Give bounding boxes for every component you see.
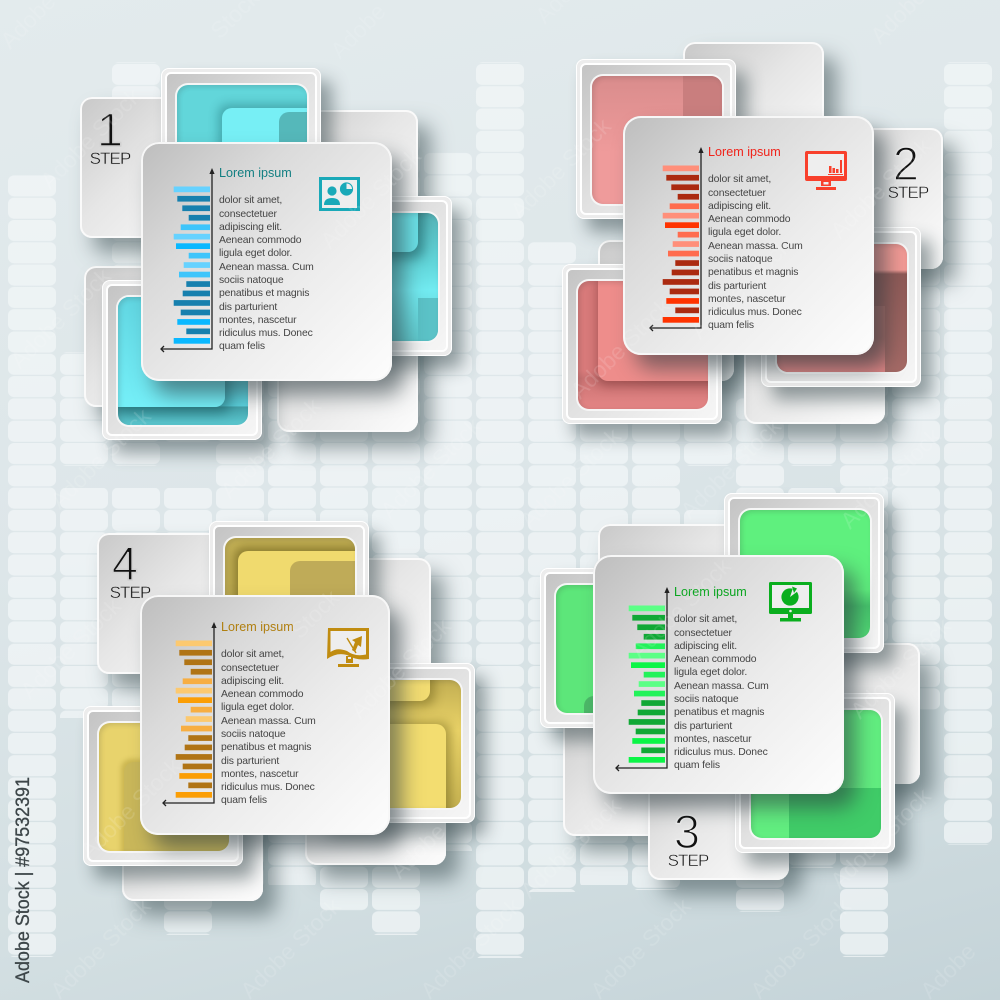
step 3 card bbox=[648, 739, 789, 880]
watermark: Adobe Stock: Adobe bbox=[385, 818, 451, 884]
frame: right yellow window bbox=[315, 663, 475, 823]
chart and text block: consectetuer bbox=[674, 628, 732, 639]
step 4 card bbox=[97, 533, 238, 674]
watermark: Adobe Stock: Adobe Stock bbox=[375, 413, 486, 524]
main card 3 bbox=[593, 555, 844, 794]
bar chart bbox=[615, 587, 670, 772]
watermark: Adobe Stock: Adobe Stock bbox=[565, 293, 676, 404]
chart and text block: montes, nascetur bbox=[708, 294, 785, 305]
chart and text block bbox=[615, 585, 769, 772]
chart and text block: ridiculus mus. Donec bbox=[221, 782, 315, 793]
step 2 card: 2 bbox=[893, 137, 919, 190]
watermark: Adobe Stock: Adobe Stock bbox=[35, 83, 146, 194]
chart and text block: sociis natoque bbox=[708, 254, 772, 265]
chart and text block: dis parturient bbox=[221, 756, 279, 767]
chart and text block: adipiscing elit. bbox=[221, 676, 284, 687]
chart and text block: quam felis bbox=[221, 795, 267, 806]
icon: monitor with bars bbox=[805, 151, 847, 190]
chart and text block: Aenean massa. Cum bbox=[708, 241, 803, 252]
watermark: Adobe Stock: Adobe Stock bbox=[675, 413, 786, 524]
watermark: Adobe Stock: Adobe Stock bbox=[5, 263, 116, 374]
watermark: Adobe Stock: Adobe Stock bbox=[15, 593, 126, 704]
chart and text block: penatibus et magnis bbox=[708, 267, 798, 278]
chart and text block: ligula eget dolor. bbox=[221, 702, 294, 713]
chart and text block: quam felis bbox=[219, 341, 265, 352]
main card 4 bbox=[140, 595, 390, 835]
watermark: Adobe Stock: Adobe Stock bbox=[345, 613, 456, 724]
panel: step 1 bbox=[80, 68, 474, 464]
chart and text block: ridiculus mus. Donec bbox=[219, 328, 313, 339]
frame: top yellow window bbox=[209, 521, 369, 681]
chart and text block: dolor sit amet, bbox=[221, 649, 284, 660]
watermark: Adobe Stock: Adobe bbox=[325, 0, 391, 64]
chart and text block bbox=[649, 145, 803, 332]
chart and text block: dis parturient bbox=[219, 302, 277, 313]
chart and text block: dis parturient bbox=[674, 721, 732, 732]
chart and text block: montes, nascetur bbox=[219, 315, 296, 326]
chart and text block: Aenean commodo bbox=[674, 654, 756, 665]
step 2 card: STEP bbox=[888, 183, 928, 202]
chart and text block: dolor sit amet, bbox=[674, 614, 737, 625]
frame: left green window bbox=[540, 568, 700, 728]
frame: bottom-left red window bbox=[562, 264, 722, 424]
bar chart bbox=[649, 147, 704, 332]
watermark: Adobe Stock: Adobe Stock bbox=[685, 233, 796, 344]
chart and text block: penatibus et magnis bbox=[221, 742, 311, 753]
watermark: Adobe Stock: Adobe Stock bbox=[315, 143, 426, 254]
chart and text block: Aenean commodo bbox=[219, 235, 301, 246]
watermark: Adobe Stock: Adobe Stock bbox=[215, 393, 326, 504]
step 4 card: 4 bbox=[112, 537, 138, 590]
watermark: Adobe Stock: Stock bbox=[285, 584, 345, 644]
chart and text block: ligula eget dolor. bbox=[219, 248, 292, 259]
chart and text block: consectetuer bbox=[221, 663, 279, 674]
chart and text block: montes, nascetur bbox=[674, 734, 751, 745]
watermark: Adobe Stock: Adobe Stock bbox=[75, 753, 186, 864]
watermark: Adobe Stock: Adobe Stock bbox=[835, 423, 946, 534]
step 1 card bbox=[80, 97, 221, 238]
chart and text block: Aenean commodo bbox=[708, 214, 790, 225]
bar chart bbox=[162, 622, 216, 806]
watermark: Adobe Stock: Adobe Stock bbox=[515, 423, 626, 534]
chart and text block: Aenean commodo bbox=[221, 689, 303, 700]
watermark: Adobe Stock: Adobe Stock bbox=[825, 783, 936, 894]
step 2 card bbox=[802, 128, 943, 269]
icon: monitor with pie chart bbox=[769, 582, 812, 622]
chart and text block: dis parturient bbox=[708, 281, 766, 292]
frame: right teal window bbox=[292, 196, 452, 356]
chart and text block: penatibus et magnis bbox=[674, 707, 764, 718]
panel: step 3 bbox=[539, 493, 947, 909]
watermark: Adobe Stock: Adobe Stock bbox=[825, 133, 936, 244]
chart and text block: sociis natoque bbox=[219, 275, 283, 286]
chart and text block bbox=[162, 620, 316, 806]
chart and text block: sociis natoque bbox=[674, 694, 738, 705]
watermark: Adobe Stock: Adobe Stock bbox=[45, 403, 156, 514]
chart and text block: consectetuer bbox=[219, 209, 277, 220]
icon: curved monitor with arrow bbox=[327, 628, 369, 667]
chart and text block: Lorem ipsum bbox=[219, 166, 292, 180]
frame: top-left red window bbox=[576, 59, 736, 219]
frame: right red window bbox=[761, 227, 921, 387]
frame: bottom-left teal window bbox=[102, 280, 262, 440]
chart and text block: ligula eget dolor. bbox=[708, 227, 781, 238]
chart and text block: Lorem ipsum bbox=[221, 620, 294, 634]
step 3 card: 3 bbox=[674, 805, 700, 858]
step 1 card: STEP bbox=[90, 149, 130, 168]
frame: bottom-left yellow window bbox=[83, 706, 243, 866]
chart and text block: Aenean massa. Cum bbox=[674, 681, 769, 692]
chart and text block: quam felis bbox=[708, 320, 754, 331]
credit line: Adobe Stock | #97532391 bbox=[13, 777, 34, 983]
chart and text block: ridiculus mus. Donec bbox=[708, 307, 802, 318]
icon: presenter screen bbox=[319, 177, 360, 211]
bar chart bbox=[160, 168, 214, 352]
step 3 card: STEP bbox=[668, 851, 708, 870]
watermark: Adobe Stock: Adobe Stock bbox=[505, 113, 616, 224]
chart and text block: montes, nascetur bbox=[221, 769, 298, 780]
chart and text block: sociis natoque bbox=[221, 729, 285, 740]
step 4 card: STEP bbox=[110, 583, 150, 602]
chart and text block: Aenean massa. Cum bbox=[221, 716, 316, 727]
chart and text block: ridiculus mus. Donec bbox=[674, 747, 768, 758]
chart and text block: Lorem ipsum bbox=[674, 585, 747, 599]
frame: top teal window bbox=[161, 68, 321, 228]
frame: bottom-right green window bbox=[735, 693, 895, 853]
chart and text block: consectetuer bbox=[708, 188, 766, 199]
frame: top green window bbox=[724, 493, 884, 653]
chart and text block: adipiscing elit. bbox=[219, 222, 282, 233]
watermark: Adobe Stock: Adobe Stock bbox=[625, 553, 736, 664]
panel: step 4 bbox=[83, 521, 498, 930]
main card 1 bbox=[141, 142, 392, 381]
step 1 card: 1 bbox=[97, 103, 123, 156]
chart and text block: Aenean massa. Cum bbox=[219, 262, 314, 273]
chart and text block: adipiscing elit. bbox=[708, 201, 771, 212]
watermark: Adobe Stock: Adobe Stock bbox=[515, 793, 626, 904]
chart and text block: Lorem ipsum bbox=[708, 145, 781, 159]
chart and text block: dolor sit amet, bbox=[708, 174, 771, 185]
chart and text block: penatibus et magnis bbox=[219, 288, 309, 299]
chart and text block: adipiscing elit. bbox=[674, 641, 737, 652]
chart and text block: ligula eget dolor. bbox=[674, 667, 747, 678]
chart and text block bbox=[160, 166, 314, 352]
chart and text block: quam felis bbox=[674, 760, 720, 771]
panel: step 2 bbox=[561, 42, 970, 453]
watermark: Adobe Stock: Adobe Stock bbox=[845, 613, 956, 724]
chart and text block: dolor sit amet, bbox=[219, 195, 282, 206]
main card 2 bbox=[623, 116, 874, 355]
